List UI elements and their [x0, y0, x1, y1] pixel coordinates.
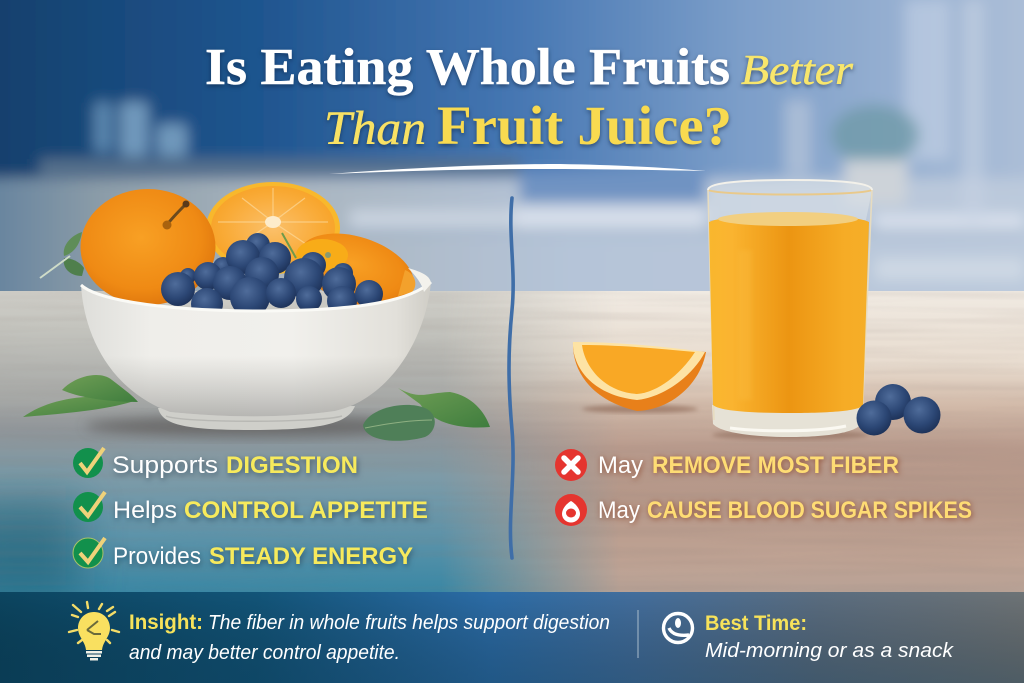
blueberries [161, 233, 383, 320]
best time text [705, 612, 954, 662]
bowl shadow [85, 415, 425, 437]
title: Better [741, 48, 854, 94]
glass body [708, 180, 872, 440]
orange wedge [573, 342, 706, 413]
right orange [289, 220, 423, 320]
drawback: fiber: REMOVE MOST FIBER [652, 452, 899, 479]
insight text [129, 611, 610, 664]
benefit: appetite [73, 492, 428, 524]
bowl body [81, 268, 431, 430]
drawback: blood sugar [555, 494, 972, 526]
best time text: Mid-morning or as a snack [705, 640, 954, 662]
benefit: digestion: DIGESTION [226, 452, 358, 479]
title [205, 39, 854, 156]
title: Than [324, 102, 426, 155]
benefits list: whole fruit [73, 448, 428, 570]
insight text: and may better control appetite. [129, 642, 400, 664]
bowl of whole fruit [23, 182, 490, 441]
drawback: blood sugar: May [598, 497, 640, 524]
loose blueberries [856, 384, 940, 436]
benefit: appetite: CONTROL APPETITE [184, 497, 428, 524]
juice [709, 212, 869, 413]
right leaves [363, 388, 490, 441]
icon: clock with figure [664, 614, 692, 642]
benefit: digestion [73, 448, 358, 479]
glass of orange juice [573, 180, 940, 440]
bottom insight band [0, 592, 1024, 683]
center divider squiggle [509, 198, 513, 558]
drawback: fiber: May [598, 452, 643, 479]
rosemary sprig [282, 233, 296, 258]
benefit: appetite: Helps [113, 497, 177, 524]
drawbacks list: juice [555, 449, 972, 526]
benefit: digestion: Supports [112, 452, 218, 479]
benefit: energy: STEADY ENERGY [209, 543, 413, 570]
title: Is Eating Whole Fruits [205, 39, 730, 96]
benefit: energy: Provides [113, 543, 201, 570]
icon: light bulb [69, 602, 119, 660]
half orange [206, 182, 340, 274]
background: wooden table [0, 291, 1024, 600]
benefit: energy [73, 538, 413, 570]
background: blurred kitchen wall [0, 0, 1024, 308]
insight text: Insight: [129, 611, 203, 634]
best time text: Best Time: [705, 612, 807, 635]
drawback: fiber [555, 449, 899, 481]
drawback: blood sugar: CAUSE BLOOD SUGAR SPIKES [647, 497, 972, 524]
whole orange [80, 189, 216, 305]
left leaves [23, 375, 138, 417]
insight text: The fiber in whole fruits helps support digestion [208, 612, 610, 634]
title underline stroke [329, 164, 706, 174]
title: Fruit Juice? [437, 95, 732, 156]
back leaf [40, 232, 84, 278]
